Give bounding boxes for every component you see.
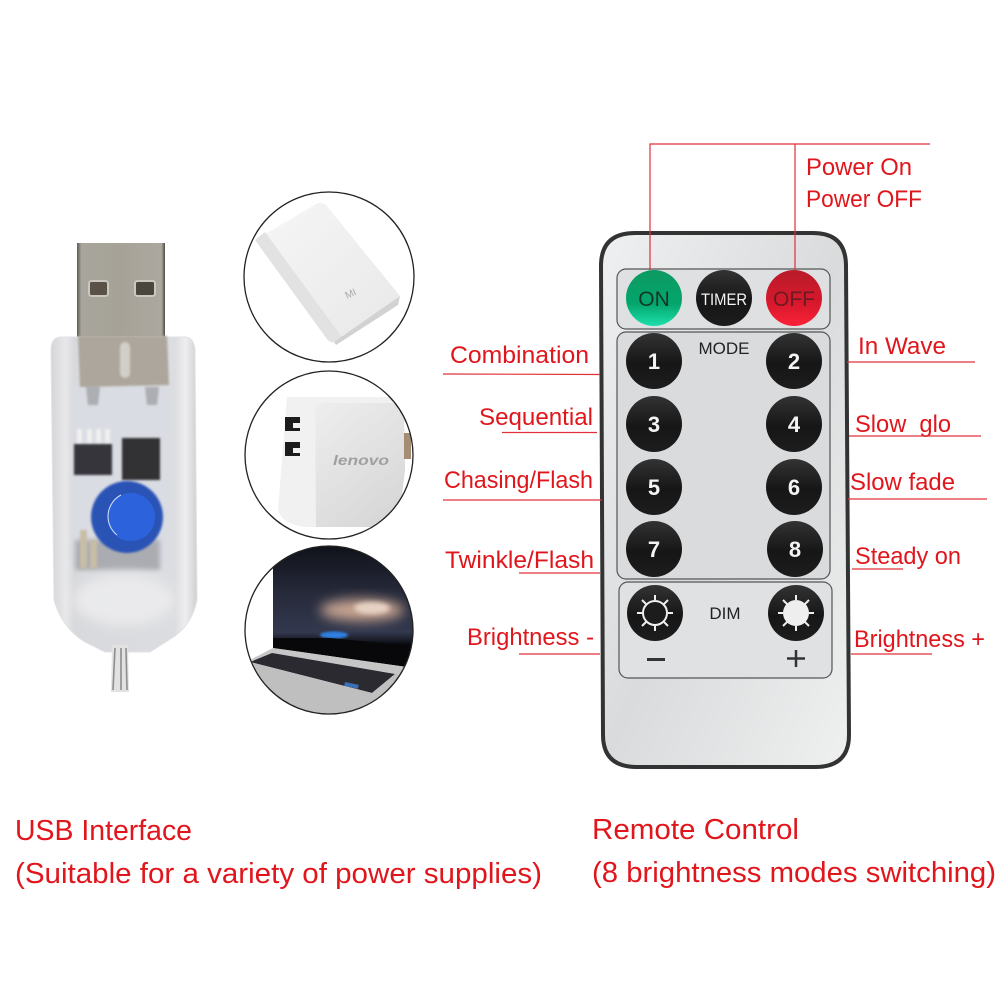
dim button group: [619, 582, 832, 678]
button 8: 8: [789, 537, 801, 562]
button 5: 5: [648, 475, 660, 500]
label: Slow fade: Slow fade: [850, 469, 955, 496]
label: Chasing/Flash: Chasing/Flash: [444, 467, 593, 494]
label: DIM: DIM: [709, 604, 741, 623]
mode button group: [617, 332, 830, 579]
button 3: 3: [648, 412, 660, 437]
button 2: 2: [788, 349, 800, 374]
transparent casing: [51, 337, 197, 652]
heading: Remote Control: Remote Control: [592, 814, 799, 846]
text: suitable for power supplies: (Suitable for a variety of power supplies): [15, 858, 542, 890]
icon: USB plug with button: [51, 243, 197, 692]
chip right: [122, 438, 160, 480]
label: In Wave: In Wave: [858, 333, 946, 360]
label: Steady on: Steady on: [855, 543, 961, 570]
metal inside casing: [78, 336, 169, 405]
plus sign: [787, 650, 805, 667]
label: Brightness plus: Brightness +: [854, 626, 985, 653]
label: In Wave: [847, 333, 975, 362]
button: OFF: OFF: [773, 288, 815, 311]
label: Brightness minus: Brightness -: [467, 624, 594, 651]
minus sign: [647, 658, 665, 661]
label: Sequential: Sequential: [479, 404, 593, 431]
button: TIMER: TIMER: [701, 290, 747, 309]
logo: MI: MI: [344, 287, 358, 302]
text: brightness modes: (8 brightness modes switching): [592, 857, 996, 889]
label: Slow fade: [848, 469, 987, 499]
label: MODE: MODE: [698, 339, 750, 358]
cable: [111, 645, 129, 692]
button 3: [626, 396, 682, 452]
casing bottom glow: [74, 574, 174, 626]
button 2: [766, 333, 822, 389]
button: TIMER: [696, 270, 752, 326]
label: Power On: Power On: [806, 154, 912, 181]
panel: power bank circle: [244, 192, 414, 362]
button 6: 6: [788, 475, 800, 500]
icon: dim plus sun: [768, 585, 824, 641]
button 4: 4: [788, 412, 801, 437]
top button group: [617, 269, 830, 329]
label: Twinkle/Flash: Twinkle/Flash: [445, 547, 594, 574]
button: OFF: [766, 270, 822, 326]
heading: USB Interface: USB Interface: [15, 815, 192, 847]
button 6: [766, 459, 822, 515]
button: ON: ON: [638, 288, 670, 311]
power leader lines: [650, 144, 930, 270]
icon: dim minus sun: [627, 585, 683, 641]
panel: remote control: [601, 233, 849, 767]
button 7: [626, 521, 682, 577]
chip left: [74, 429, 112, 475]
button 8: [767, 521, 823, 577]
blue button: [91, 481, 163, 553]
USB metal connector: [77, 243, 165, 338]
button 1: [626, 333, 682, 389]
label: Slow glo: Slow glo: [855, 411, 951, 438]
logo: lenovo: lenovo: [333, 452, 390, 468]
button 5: [626, 459, 682, 515]
panel: laptop circle: [245, 546, 414, 720]
button 1: 1: [648, 349, 660, 374]
label: Combination: Combination: [450, 342, 589, 369]
button 4: [766, 396, 822, 452]
panel: wall charger circle: [245, 371, 413, 539]
button: ON: [626, 270, 682, 326]
label: Power OFF: Power OFF: [806, 186, 922, 213]
button 7: 7: [648, 537, 660, 562]
